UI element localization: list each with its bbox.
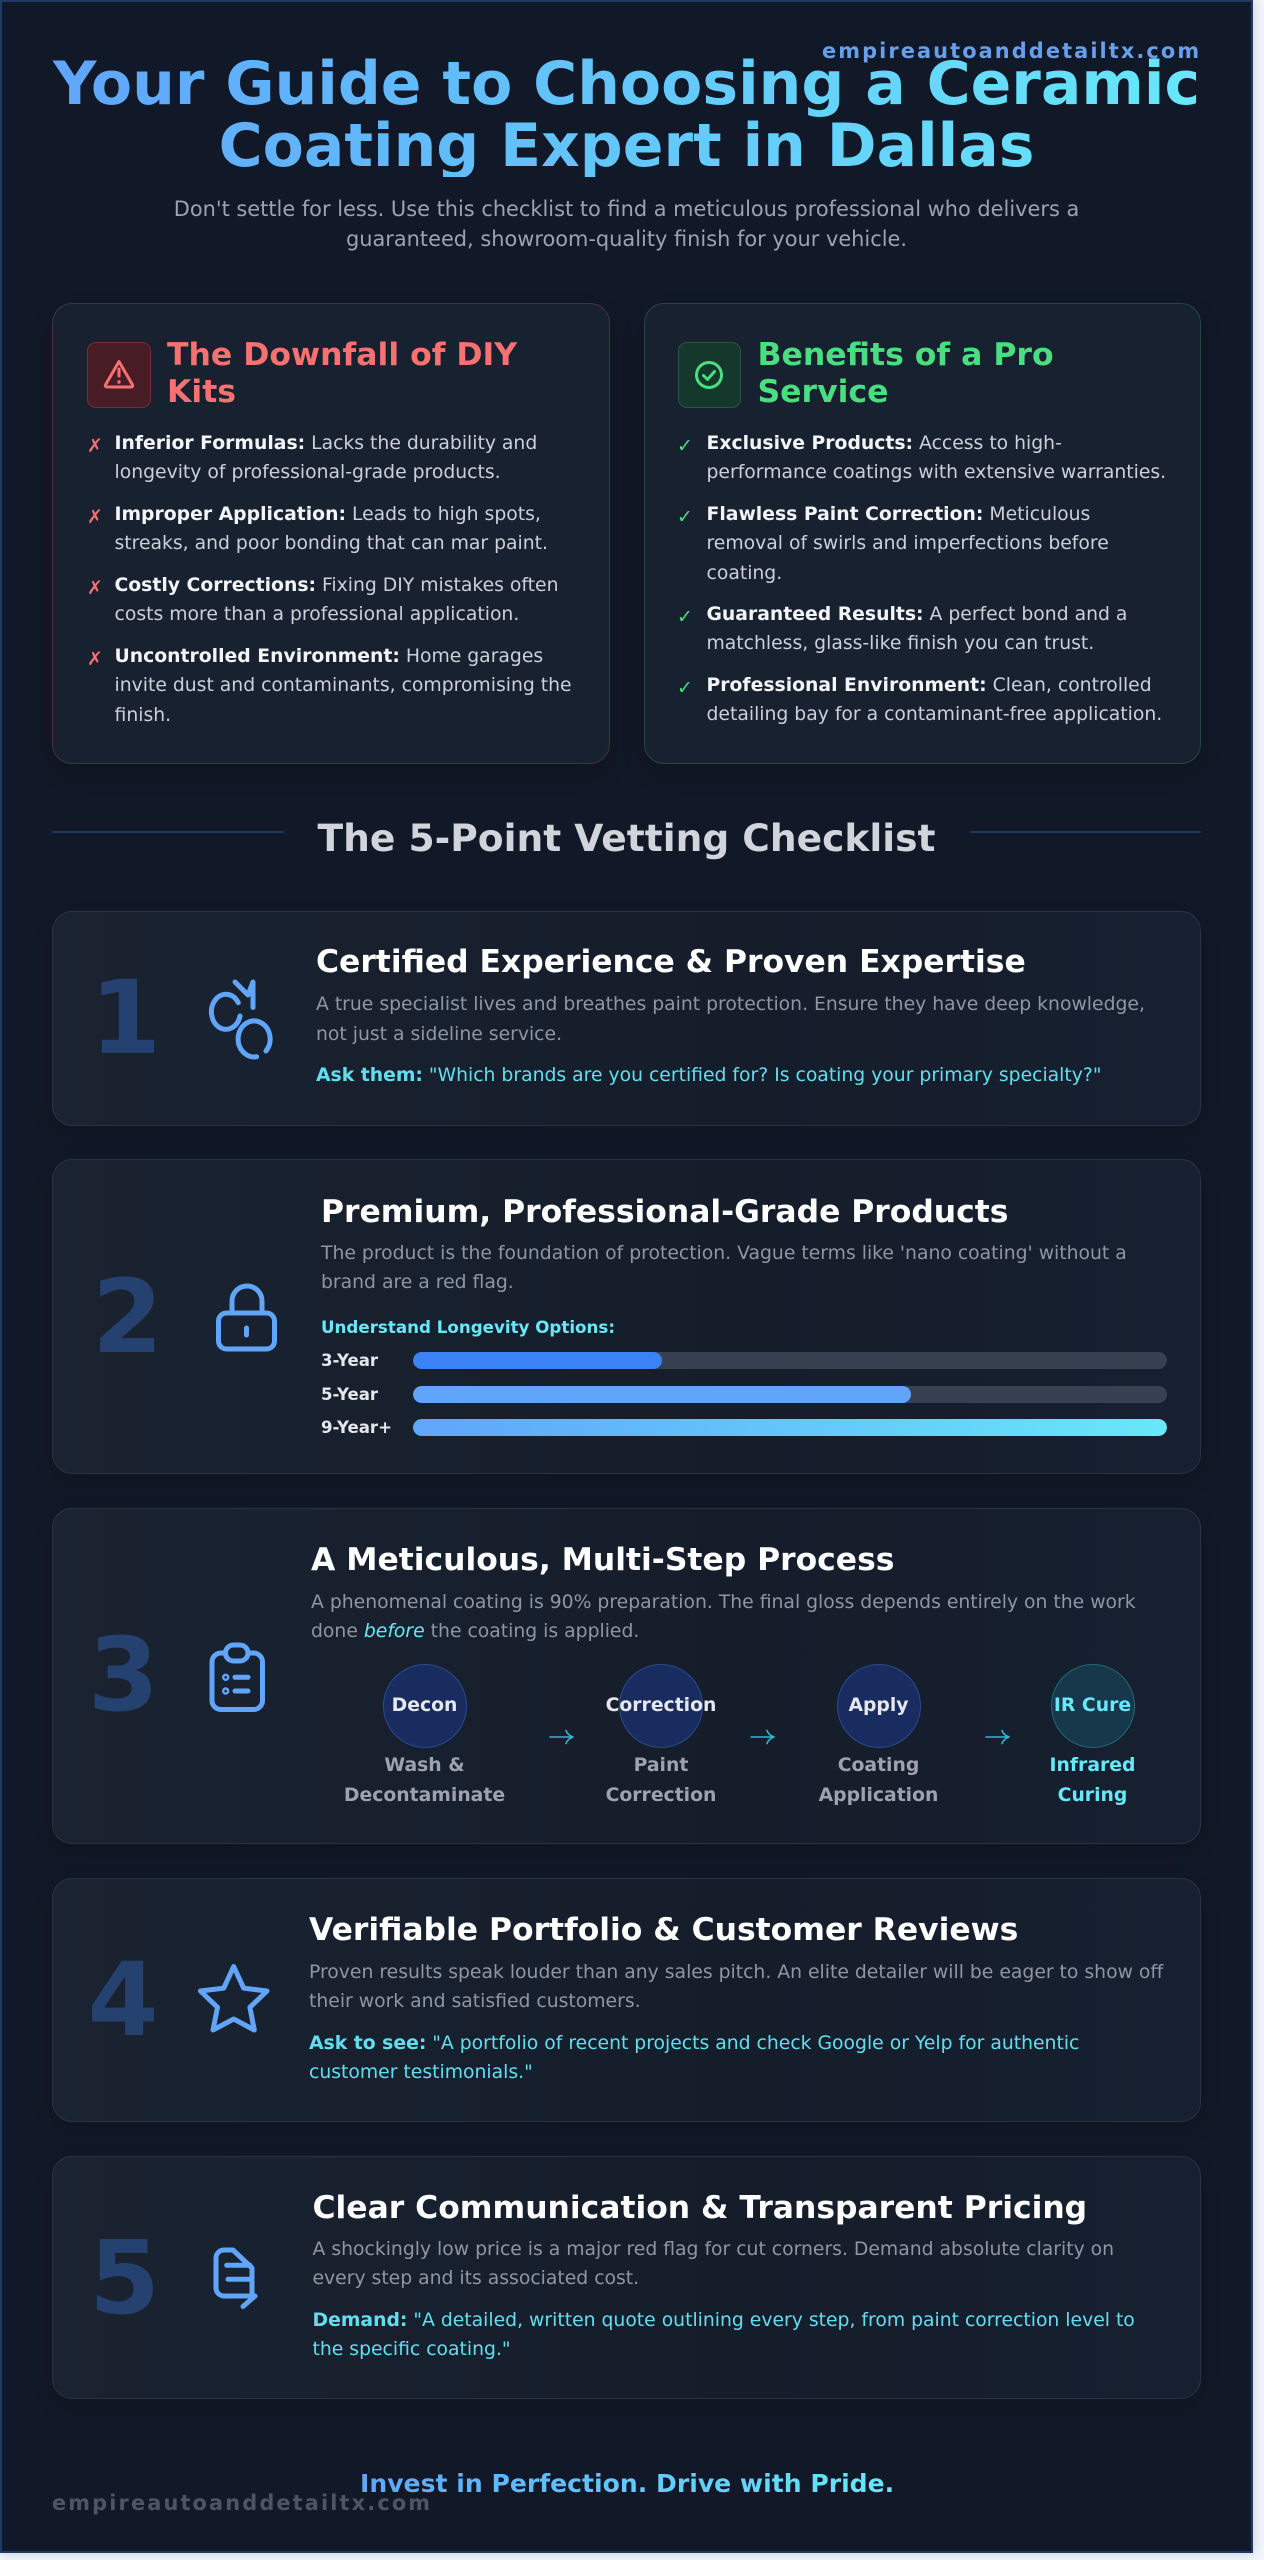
item: flawless paint correction: removal of swirls and imperfections before [706,533,1109,554]
process step: apply [818,1664,938,1806]
icon: document [214,2248,258,2309]
heading: The Downfall of DIY [167,336,517,372]
item: uncontrolled environment [114,646,572,726]
bar 9-year [413,1419,1167,1436]
icon: star [198,1964,270,2032]
demand: Demand: "A detailed, written quote outlining every step, from paint correction level to [312,2310,1135,2331]
heading: Clear Communication & Transparent Pricing [312,2190,1087,2226]
item: inferior formulas [114,433,537,483]
description: not just a sideline service. [316,1024,562,1045]
arrow [549,1730,574,1744]
panel: benefits of a pro service [644,303,1201,764]
item: exclusive products: Exclusive Products: Access to high- [706,433,1062,454]
number 5: 5 [89,2219,160,2338]
item: guaranteed results [706,604,1127,654]
item: uncontrolled environment: finish. [114,705,171,726]
bar 3-year [413,1352,1167,1369]
number 1: 1 [90,958,161,1078]
caption: Curing [1058,1785,1127,1806]
circle [836,1664,920,1748]
bar label 5-year: 5-Year [321,1385,378,1404]
mark: ✓ [677,678,693,699]
description: Proven results speak louder than any sales pitch. An elite detailer will be eager to show off [309,1962,1163,1983]
item: professional environment: detailing bay for a contaminant-free application. [706,704,1162,725]
description: every step and its associated cost. [312,2268,639,2289]
item: inferior formulas: Inferior Formulas: Lacks the durability and [114,433,537,454]
title [52,53,1201,177]
caption [606,1755,716,1806]
demand [312,2310,1135,2360]
caption: Decontaminate [344,1785,505,1806]
description: A phenomenal coating is 90% preparation. The final gloss depends entirely on the work [311,1592,1136,1613]
item: flawless paint correction: Flawless Paint Correction: Meticulous [706,504,1090,525]
section heading: The 5-Point Vetting Checklist [318,816,935,860]
description: The product is the foundation of protection. Vague terms like 'nano coating' without a [321,1243,1127,1264]
item: professional environment [706,675,1162,725]
description: done before the coating is applied. [311,1621,639,1642]
caption: Correction [606,1785,716,1806]
circle label: IR Cure [1054,1694,1131,1716]
heading [167,336,518,410]
subtitle [174,197,1079,251]
item: costly corrections: costs more than a professional application. [114,604,519,625]
caption [1050,1755,1135,1806]
icon: badge circles [208,980,273,1060]
description [311,1592,1136,1642]
mark: ✓ [677,507,693,528]
caption [344,1755,505,1806]
arrow [750,1730,775,1744]
icon: lock [216,1284,277,1352]
circle [619,1664,703,1748]
item: costly corrections: Costly Corrections: Fixing DIY mistakes often [114,575,559,596]
description: A shockingly low price is a major red flag for cut corners. Demand absolute clarity on [312,2239,1114,2260]
caption: Coating [838,1755,919,1776]
demand: the specific coating." [312,2339,511,2360]
heading: Service [758,374,888,410]
title: Coating Expert in Dallas [219,111,1034,181]
bar 5-year [413,1386,1167,1403]
panel: step 4 [52,1878,1201,2122]
description [312,2239,1114,2289]
heading: A Meticulous, Multi-Step Process [311,1542,894,1578]
mark: ✗ [87,507,103,528]
bar label 9-year: 9-Year+ [321,1418,392,1437]
heading: Premium, Professional-Grade Products [321,1194,1008,1230]
caption [818,1755,938,1806]
website link top: empireautoanddetailtx.com [822,39,1201,63]
ask to see: customer testimonials." [309,2062,533,2083]
item: improper application: streaks, and poor bonding that can mar paint. [114,533,548,554]
heading: Verifiable Portfolio & Customer Reviews [309,1912,1018,1948]
panel: step 5 [52,2156,1201,2399]
description: A true specialist lives and breathes paint protection. Ensure they have deep knowledge, [316,994,1145,1015]
icon: clipboard [210,1642,265,1712]
mark: ✗ [87,436,103,457]
description: their work and satisfied customers. [309,1991,641,2012]
item: flawless paint correction: coating. [706,563,782,584]
description: brand are a red flag. [321,1272,514,1293]
panel: step 3 [52,1508,1201,1844]
item: uncontrolled environment: Uncontrolled Environment: Home garages [114,646,543,667]
number 2: 2 [92,1258,163,1377]
subtitle: Don't settle for less. Use this checklist to find a meticulous professional who delivers a [174,197,1079,221]
circle label: Decon [392,1694,457,1716]
caption: Paint [634,1755,688,1776]
description [320,1243,1127,1293]
ask to see: Ask to see: "A portfolio of recent projects and check Google or Yelp for authentic [309,2032,1079,2054]
website link bottom: empireautoanddetailtx.com [52,2491,432,2515]
heading: Kits [167,374,236,410]
item: improper application [114,504,548,554]
circle label: Correction [606,1694,716,1716]
number 4: 4 [88,1941,158,2060]
item: professional environment: Professional Environment: Clean, controlled [706,675,1152,696]
panel: downfall of DIY kits [52,303,610,764]
mark: ✗ [87,649,103,670]
title: Your Guide to Choosing a Ceramic [53,49,1200,119]
caption: Application [819,1785,938,1806]
item: uncontrolled environment: invite dust and contaminants, compromising the [114,675,572,696]
process step: decon [344,1664,505,1806]
description [309,1962,1164,2012]
longevity label: Understand Longevity Options: [321,1317,615,1337]
mark: ✓ [677,436,693,457]
bar label 3-year: 3-Year [321,1351,378,1370]
caption: Infrared [1050,1755,1135,1776]
item: guaranteed results: Guaranteed Results: A perfect bond and a [706,604,1127,625]
mark: ✗ [87,578,103,599]
item: inferior formulas: longevity of professional-grade products. [114,462,501,483]
process step: correction [606,1664,716,1806]
circle [1050,1664,1134,1748]
description [316,994,1145,1045]
item: costly corrections [114,575,559,625]
number 3: 3 [88,1616,159,1735]
circle [382,1664,466,1748]
heading: Certified Experience & Proven Expertise [316,944,1026,980]
item: guaranteed results: matchless, glass-like finish you can trust. [706,633,1094,654]
item: exclusive products [706,433,1166,483]
circle label: Apply [848,1694,909,1716]
heading [758,336,1054,410]
mark: ✓ [677,607,693,628]
item: improper application: Improper Application: Leads to high spots, [114,504,541,525]
item: flawless paint correction [706,504,1109,584]
arrow [985,1730,1010,1744]
item: exclusive products: performance coatings with extensive warranties. [706,462,1166,483]
footer tagline: Invest in Perfection. Drive with Pride. [360,2469,894,2498]
icon: check circle [678,342,741,408]
subtitle: guaranteed, showroom-quality finish for your vehicle. [346,227,907,251]
icon: warning triangle [87,342,151,408]
process step: infrared cure [1050,1664,1135,1806]
caption: Wash & [384,1755,465,1776]
panel: step 1 [52,911,1201,1126]
question: Ask them: "Which brands are you certified for? Is coating your primary specialty?" [316,1065,1102,1086]
panel: step 2 [52,1159,1201,1474]
ask to see [309,2032,1079,2083]
heading: Benefits of a Pro [758,336,1054,372]
